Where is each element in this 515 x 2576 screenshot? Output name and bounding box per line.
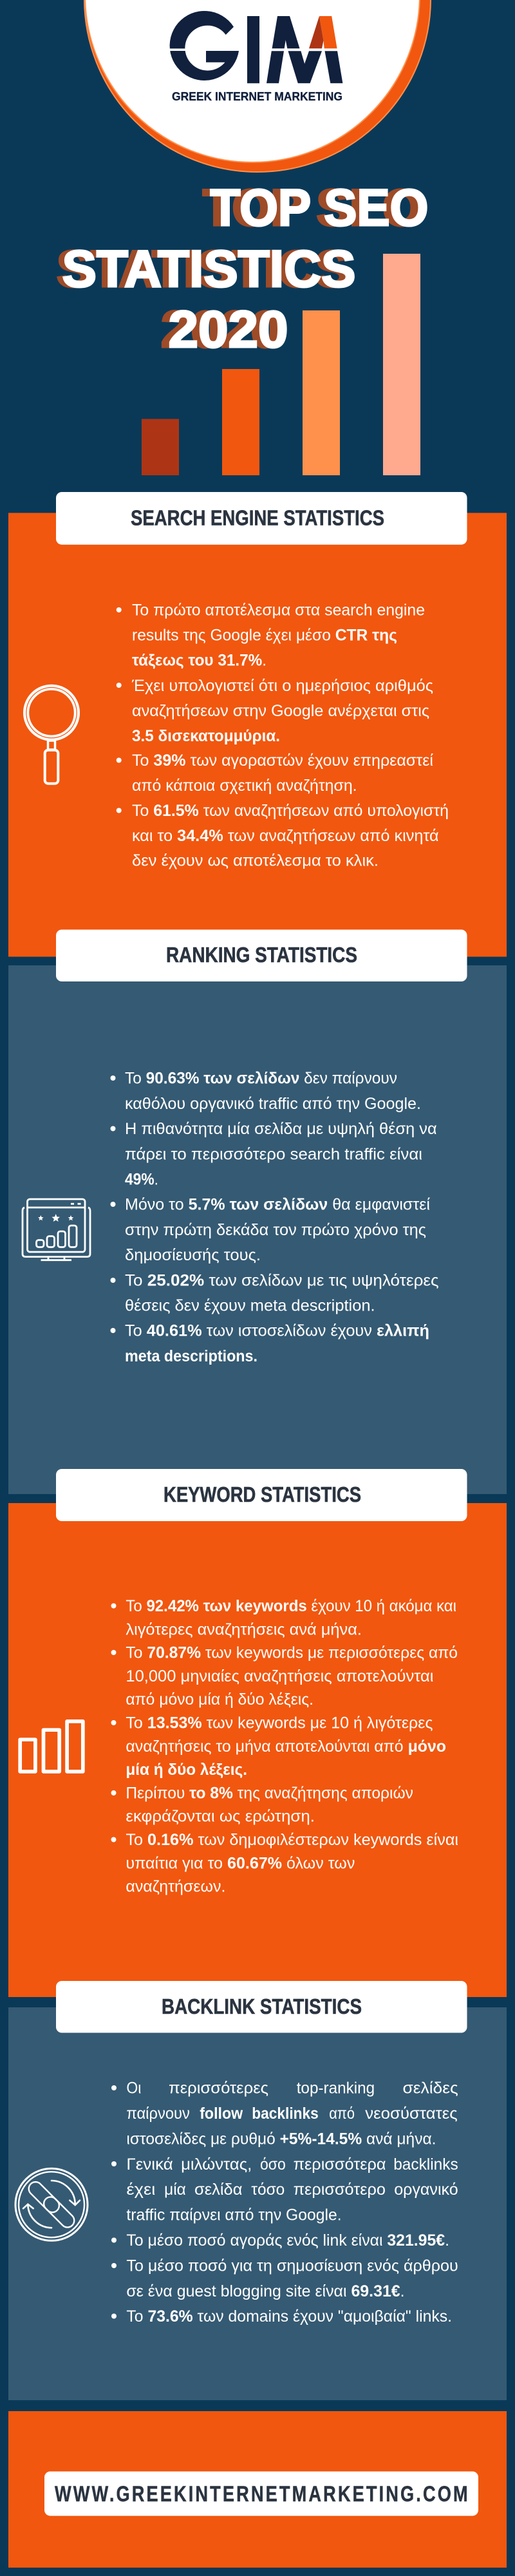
keyword bullet list: Περίπου το 8% της αναζήτησης αποριών bbox=[126, 1784, 413, 1802]
ranking bullet list: θέσεις δεν έχουν meta description. bbox=[125, 1297, 375, 1315]
backlink bullet list bbox=[111, 2079, 458, 2325]
footer url box bbox=[44, 2472, 478, 2516]
backlink bullet list: Το μέσο ποσό αγοράς ενός link είναι 321.95€. bbox=[126, 2231, 449, 2249]
backlink bullet list: σελίδα bbox=[194, 2181, 242, 2199]
search engine bullet list: δεν έχουν ως αποτέλεσμα το κλικ. bbox=[132, 851, 379, 869]
ranking bullet list: Το 90.63% των σελίδων δεν παίρνουν bbox=[125, 1070, 397, 1088]
title: 2020 bbox=[169, 301, 288, 359]
keyword bullet list: μία ή δύο λέξεις. bbox=[126, 1761, 247, 1779]
title bbox=[57, 179, 429, 359]
search engine bullet list: Το 39% των αγοραστών έχουν επηρεαστεί bbox=[132, 752, 433, 770]
keyword bullet list: 10,000 μηνιαίες αναζητήσεις αποτελούνται bbox=[126, 1667, 433, 1685]
backlink bullet list: Γενικά bbox=[126, 2155, 173, 2174]
ranking bullet list: 49%. bbox=[125, 1171, 158, 1189]
icon: three bars bbox=[20, 1721, 83, 1772]
orange ring behind circle bbox=[84, 0, 431, 172]
backlink bullet list: τόσο bbox=[251, 2181, 285, 2199]
heading: ranking statistics bbox=[56, 930, 467, 981]
backlink bullet list: από bbox=[329, 2105, 355, 2123]
search engine bullet list: τάξεως του 31.7%. bbox=[132, 652, 267, 670]
backlink bullet list: όσο bbox=[260, 2155, 286, 2174]
heading: backlink statistics bbox=[56, 1981, 467, 2032]
backlink bullet list: σελίδες bbox=[403, 2079, 458, 2098]
backlink bullet list: traffic παίρνει από την Google. bbox=[126, 2206, 342, 2224]
ranking bullet list bbox=[111, 1070, 439, 1365]
backlink bullet list: backlinks bbox=[252, 2105, 319, 2123]
ranking bullet list: καθόλου οργανικό traffic από την Google. bbox=[125, 1095, 421, 1113]
heading: backlink statistics: BACKLINK STATISTICS bbox=[162, 1995, 362, 2019]
backlink bullet list: Το μέσο ποσό για τη σημοσίευση ενός άρθρου bbox=[126, 2257, 458, 2275]
logo wordmark: GREEK INTERNET MARKETING bbox=[172, 90, 342, 103]
ranking bullet list: στην πρώτη δεκάδα τον πρώτο χρόνο της bbox=[125, 1221, 426, 1239]
backlink bullet list: Το 73.6% των domains έχουν "αμοιβαία" links. bbox=[126, 2307, 452, 2325]
ranking bullet list: Μόνο το 5.7% των σελίδων θα εμφανιστεί bbox=[125, 1196, 430, 1214]
ranking bullet list: Το 25.02% των σελίδων με τις υψηλότερες bbox=[125, 1271, 439, 1289]
search engine bullet list: από κάποια σχετική αναζήτηση. bbox=[132, 777, 357, 795]
backlink bullet list: περισσότερες bbox=[169, 2079, 268, 2098]
search engine bullet list: αναζητήσεων στην Google ανέρχεται στις bbox=[132, 702, 429, 720]
backlink bullet list: περισσότερα bbox=[294, 2155, 386, 2174]
icon: magnifying glass bbox=[26, 687, 77, 784]
panel: search engine statistics bbox=[8, 513, 507, 957]
search engine bullet list: results της Google έχει μέσο CTR της bbox=[132, 627, 397, 645]
keyword bullet list: υπαίτια για το 60.67% όλων των bbox=[126, 1854, 355, 1872]
search engine bullet list: και το 34.4% των αναζητήσεων από κινητά bbox=[132, 827, 439, 845]
keyword bullet list: Το 13.53% των keywords με 10 ή λιγότερες bbox=[126, 1714, 433, 1732]
search engine bullet list: Το 61.5% των αναζητήσεων από υπολογιστή bbox=[132, 802, 449, 820]
ranking bullet list: πάρει το περισσότερο search traffic είναι bbox=[125, 1145, 422, 1163]
search engine bullet list: Το πρώτο αποτέλεσμα στα search engine bbox=[132, 601, 425, 620]
footer url box: WWW.GREEKINTERNETMARKETING.COM bbox=[55, 2481, 471, 2506]
heading: search engine statistics: SEARCH ENGINE STATISTICS bbox=[131, 506, 384, 531]
backlink bullet list: παίρνουν bbox=[126, 2105, 190, 2123]
backlink bullet list: backlinks bbox=[393, 2155, 458, 2174]
backlink bullet list: ιστοσελίδες με ρυθμό +5%-14.5% ανά μήνα. bbox=[126, 2130, 436, 2148]
backlink bullet list: σε ένα guest blogging site είναι 69.31€. bbox=[126, 2282, 405, 2300]
heading: keyword statistics bbox=[56, 1469, 467, 1521]
title: 2020 bbox=[161, 301, 281, 359]
GIM logo mark bbox=[167, 11, 342, 83]
backlink bullet list: μία bbox=[164, 2181, 186, 2199]
keyword bullet list: αναζητήσεων. bbox=[126, 1878, 225, 1896]
heading: keyword statistics: KEYWORD STATISTICS bbox=[164, 1483, 361, 1507]
panel: ranking statistics bbox=[8, 965, 507, 1494]
logo badge bbox=[84, 0, 431, 172]
keyword bullet list: αναζητήσεις το μήνα αποτελούνται από μόνο bbox=[126, 1738, 446, 1756]
keyword bullet list: Το 0.16% των δημοφιλέστερων keywords είναι bbox=[126, 1831, 458, 1849]
search engine bullet list: 3.5 δισεκατομμύρια. bbox=[132, 727, 280, 745]
heading: search engine statistics bbox=[56, 492, 467, 545]
backlink bullet list: περισσότερο bbox=[294, 2181, 386, 2199]
backlink bullet list: μιλώντας, bbox=[181, 2155, 252, 2174]
keyword bullet list: Το 70.87% των keywords με περισσότερες από bbox=[126, 1644, 458, 1662]
backlink bullet list: follow bbox=[200, 2105, 243, 2123]
ranking bullet list: δημοσίευσής τους. bbox=[125, 1246, 261, 1264]
title: STATISTICS bbox=[62, 240, 355, 298]
search engine bullet list bbox=[117, 601, 449, 869]
keyword bullet list: Το 92.42% των keywords έχουν 10 ή ακόμα και bbox=[126, 1597, 456, 1615]
bar chart decoration bbox=[142, 254, 420, 475]
ranking bullet list: meta descriptions. bbox=[125, 1347, 258, 1365]
ranking bullet list: Η πιθανότητα μία σελίδα με υψηλή θέση να bbox=[125, 1120, 437, 1138]
icon: chain link with arrows bbox=[15, 2168, 88, 2240]
title: STATISTICS bbox=[57, 240, 349, 298]
title: TOP SEO bbox=[210, 179, 429, 237]
backlink bullet list: οργανικό bbox=[394, 2181, 458, 2199]
keyword bullet list: λιγότερες αναζητήσεις ανά μήνα. bbox=[126, 1620, 362, 1638]
keyword bullet list bbox=[111, 1597, 458, 1896]
panel: backlink statistics bbox=[8, 2007, 507, 2400]
title: TOP SEO bbox=[202, 179, 421, 237]
panel: footer bbox=[8, 2411, 507, 2568]
keyword bullet list: εκφράζονται ως ερώτηση. bbox=[126, 1808, 315, 1826]
backlink bullet list: Οι bbox=[126, 2079, 141, 2098]
search engine bullet list: Έχει υπολογιστεί ότι ο ημερήσιος αριθμός bbox=[131, 677, 433, 695]
heading: ranking statistics: RANKING STATISTICS bbox=[166, 943, 357, 967]
white circle bbox=[85, 0, 420, 162]
backlink bullet list: top-ranking bbox=[297, 2079, 375, 2098]
icon: monitor with ranking bars bbox=[23, 1199, 90, 1260]
keyword bullet list: από μόνο μία ή δύο λέξεις. bbox=[126, 1690, 314, 1709]
panel: keyword statistics bbox=[8, 1503, 507, 1997]
ranking bullet list: Το 40.61% των ιστοσελίδων έχουν ελλιπή bbox=[125, 1322, 429, 1340]
backlink bullet list: έχει bbox=[126, 2181, 155, 2199]
backlink bullet list: νεοσύστατες bbox=[365, 2105, 458, 2123]
